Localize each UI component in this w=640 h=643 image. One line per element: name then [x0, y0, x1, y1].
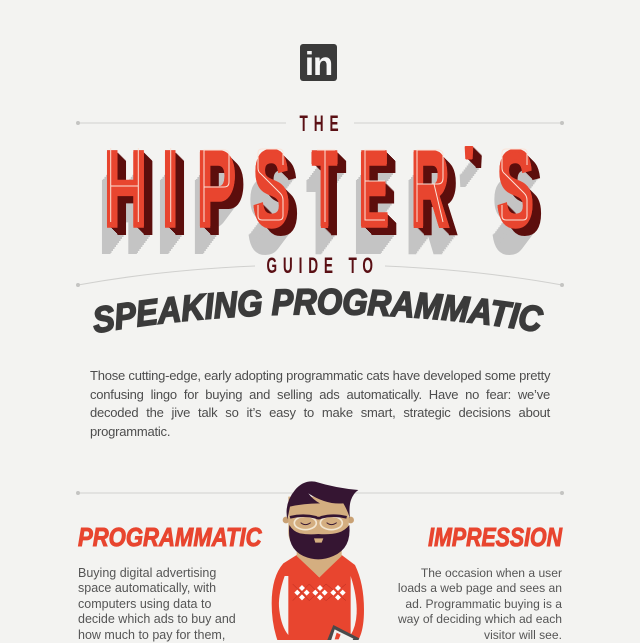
face	[288, 497, 349, 556]
intro text	[90, 368, 550, 439]
beard	[289, 525, 350, 559]
ears and neck	[283, 517, 289, 523]
text: impression definition: visitor will see.	[484, 628, 562, 642]
title: HIPSTER'S: I	[162, 128, 178, 249]
text: programmatic definition: decide which ads to buy and	[78, 612, 236, 626]
title: HIPSTER'S: H	[104, 128, 146, 249]
text: impression definition: way of deciding which ad each	[398, 612, 562, 626]
text: programmatic definition	[78, 566, 236, 642]
heading: THE: THE	[300, 111, 344, 136]
glasses	[294, 516, 342, 530]
intro text: Those cutting-edge, early adopting programmatic cats have developed some pretty	[90, 368, 550, 383]
title: HIPSTER'S: '	[463, 136, 475, 192]
heading: PROGRAMMATIC: PROGRAMMATIC	[78, 523, 262, 552]
heading: SPEAKING PROGRAMMATIC: SPEAKING PROGRAMMATIC	[93, 288, 544, 333]
tablet	[326, 625, 359, 643]
intro text: confusing lingo for buying and selling ads automatically. Have no fear: we’ve	[90, 387, 550, 402]
title: HIPSTER'S: P	[196, 128, 235, 249]
text: impression definition: loads a web page and sees an	[398, 581, 562, 595]
icon: LinkedIn logo: in	[305, 45, 332, 82]
title: HIPSTER'S: E	[358, 128, 388, 249]
sweater body	[272, 555, 364, 640]
text: impression definition: The occasion when a user	[421, 566, 562, 580]
title: HIPSTER'S: S	[252, 128, 289, 249]
intro text: programmatic.	[90, 424, 170, 439]
argyle pattern	[293, 584, 346, 601]
text: impression definition: ad. Programmatic buying is a	[405, 597, 562, 611]
heading: GUIDE TO: GUIDE TO	[266, 253, 379, 278]
title: HIPSTER'S: T	[312, 128, 337, 249]
text: impression definition	[398, 566, 562, 642]
title: HIPSTER'S	[102, 128, 542, 255]
text: programmatic definition: space automatically, with	[78, 581, 216, 595]
title: HIPSTER'S: R	[410, 128, 449, 249]
text: programmatic definition: Buying digital advertising	[78, 566, 216, 580]
text: programmatic definition: computers using data to	[78, 597, 211, 611]
intro text: decoded the jive talk so it’s easy to make smart, strategic decisions about	[90, 405, 550, 420]
title: HIPSTER'S: S	[496, 128, 533, 249]
hair	[287, 481, 358, 519]
heading: IMPRESSION: IMPRESSION	[428, 523, 563, 553]
text: programmatic definition: how much to pay for them,	[78, 628, 225, 642]
